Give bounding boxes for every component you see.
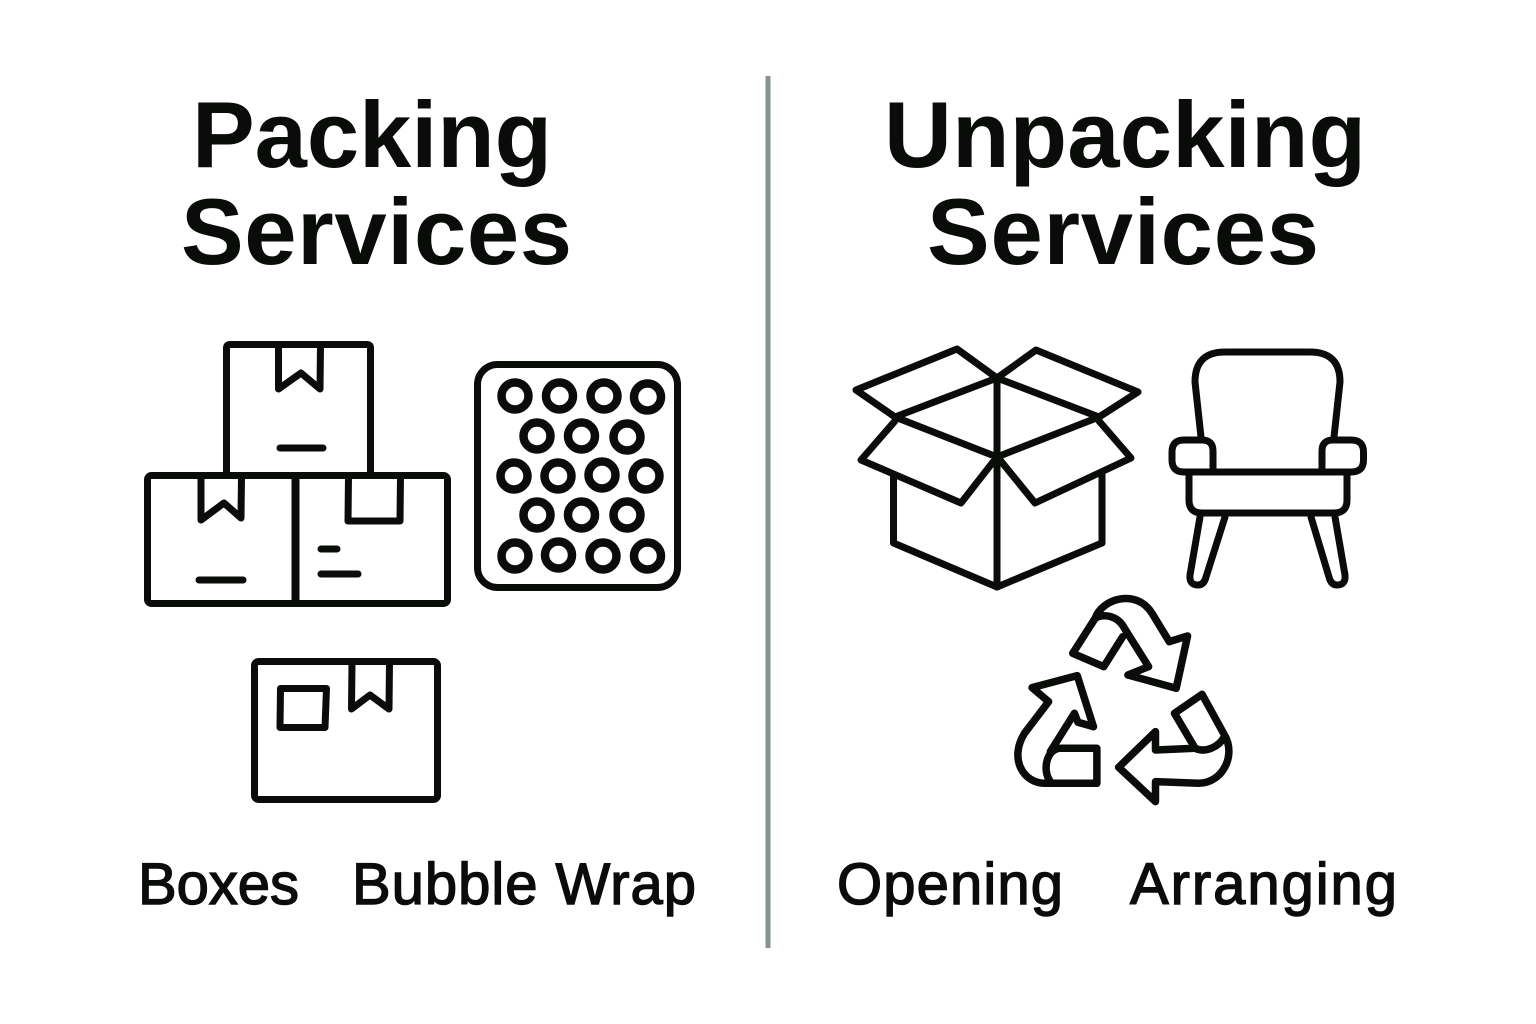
icon: single box [254, 662, 438, 800]
label: opening: Opening [837, 852, 1063, 917]
panel: packing services [138, 82, 696, 917]
icon: armchair [1172, 352, 1364, 585]
label: bubble wrap: Bubble Wrap [352, 852, 696, 917]
icon: bubble wrap [478, 364, 678, 588]
icon: stacked boxes [148, 344, 448, 604]
divider [766, 76, 770, 948]
heading: unpacking services: Unpacking [884, 82, 1366, 187]
label: boxes: Boxes [138, 852, 299, 917]
heading: packing services: Packing [192, 82, 552, 187]
heading: packing services: Services [181, 179, 572, 284]
heading: unpacking services [884, 82, 1366, 284]
label: arranging: Arranging [1130, 852, 1397, 917]
heading: packing services [181, 82, 572, 284]
panel: unpacking services [837, 82, 1397, 917]
icon: open box [856, 349, 1138, 587]
icon: recycle arrows [1018, 598, 1229, 802]
heading: unpacking services: Services [927, 179, 1319, 284]
